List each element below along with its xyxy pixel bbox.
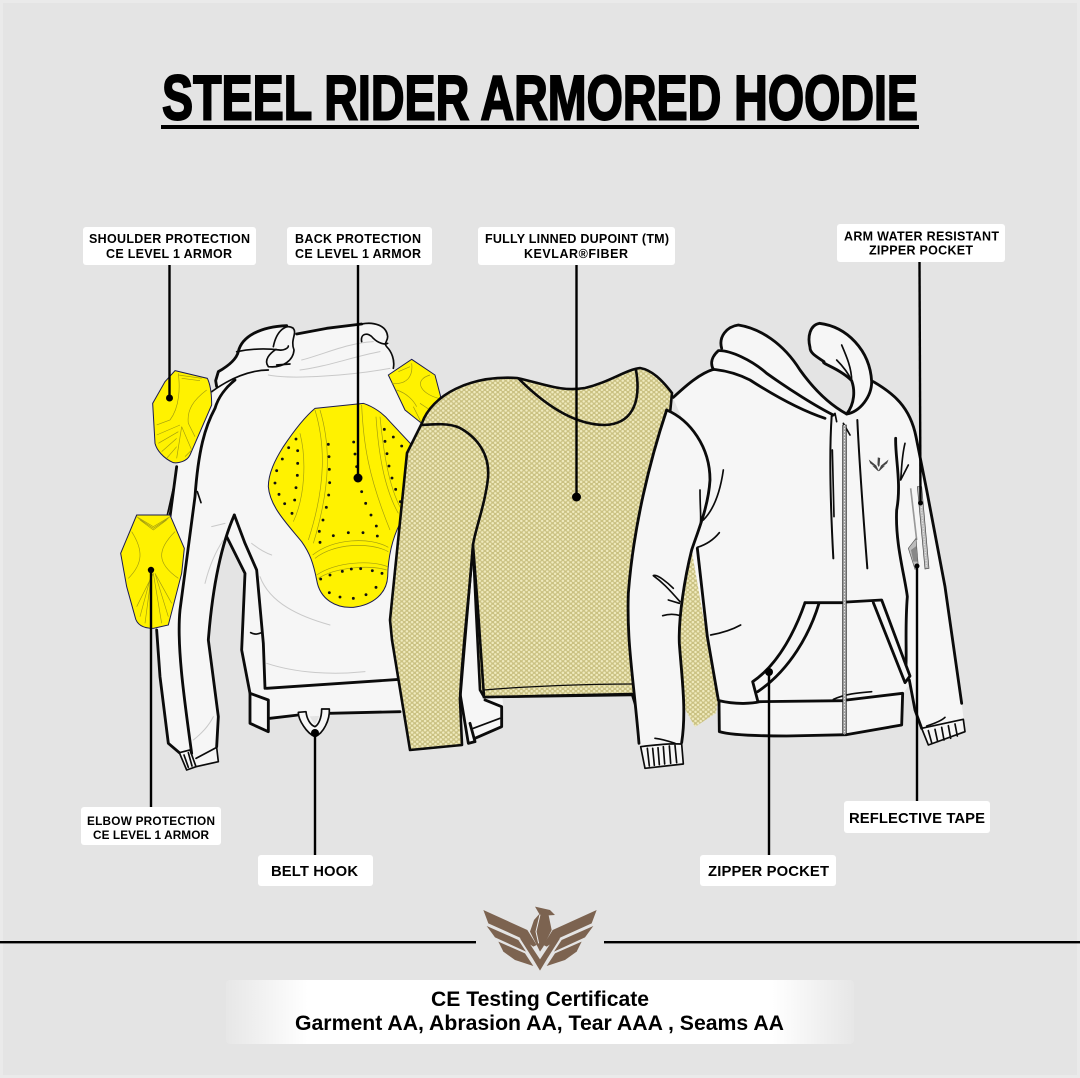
- armor: left shoulder: [153, 371, 212, 463]
- back view hoodie illustration: [121, 323, 503, 770]
- callout: elbow protection: [81, 567, 221, 845]
- callout: belt hook: [258, 729, 373, 886]
- hoodie body back: [157, 323, 503, 770]
- callout: arm zipper pocket: ARM WATER RESISTANT: [844, 230, 999, 244]
- certificate panel: [226, 980, 854, 1044]
- callout: arm zipper pocket: ZIPPER POCKET: [869, 244, 973, 258]
- brand eagle logo: [483, 907, 597, 971]
- callout: kevlar fiber: KEVLAR®FIBER: [524, 247, 628, 261]
- belt hook: [298, 709, 330, 737]
- front view hoodie illustration: [628, 323, 965, 768]
- footer divider lines: [0, 941, 1080, 943]
- callout: belt hook: BELT HOOK: [271, 864, 358, 880]
- armor: back protector: [268, 403, 413, 607]
- hoodie body front: [673, 323, 965, 745]
- callout: elbow protection: ELBOW PROTECTION: [87, 814, 215, 828]
- certificate panel: CE Testing Certificate: [431, 988, 649, 1011]
- mesh kevlar liner garment: [390, 368, 672, 750]
- front hoodie outlines: [628, 323, 965, 768]
- callout: shoulder protection: SHOULDER PROTECTION: [89, 232, 250, 246]
- callout: elbow protection: CE LEVEL 1 ARMOR: [93, 828, 209, 842]
- arm zipper pocket: [908, 487, 929, 569]
- callout: back protection: BACK PROTECTION: [295, 232, 421, 246]
- callout: shoulder protection: [83, 227, 256, 402]
- kangaroo pocket: [805, 600, 910, 683]
- callout: reflective tape: [844, 564, 990, 833]
- armor: elbow: [121, 515, 184, 628]
- drawstrings: [830, 413, 867, 568]
- callout: zipper pocket: [700, 668, 836, 886]
- center zipper: [843, 425, 846, 734]
- armor: right shoulder: [388, 359, 441, 423]
- callout: zipper pocket: ZIPPER POCKET: [708, 864, 829, 880]
- callout: arm zipper pocket: [837, 224, 1005, 506]
- mesh visible behind front hoodie: [675, 550, 718, 727]
- callout: kevlar fiber: [478, 227, 675, 502]
- callout: back protection: CE LEVEL 1 ARMOR: [295, 247, 421, 261]
- callout: back protection: [287, 227, 432, 482]
- certificate panel: Garment AA, Abrasion AA, Tear AAA , Seams AA: [295, 1012, 784, 1035]
- chest logo: [869, 457, 889, 471]
- callout: kevlar fiber: FULLY LINNED DUPOINT (TM): [485, 232, 669, 246]
- callout: reflective tape: REFLECTIVE TAPE: [849, 811, 985, 827]
- waist hem: [719, 693, 903, 736]
- front left sleeve: [628, 410, 710, 768]
- hoodie outlines back: [157, 323, 502, 770]
- callout: shoulder protection: CE LEVEL 1 ARMOR: [106, 247, 232, 261]
